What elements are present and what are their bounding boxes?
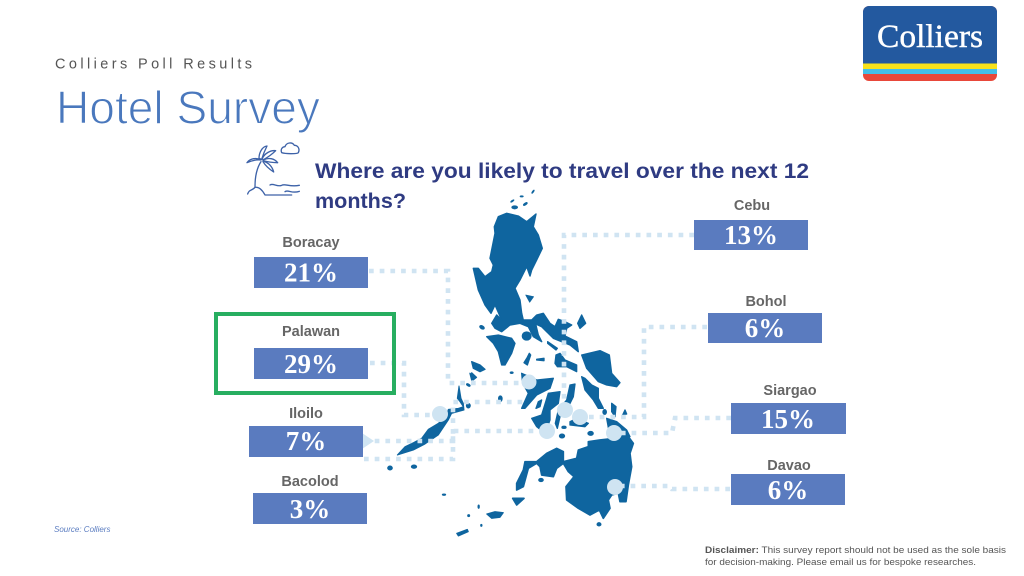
- disclaimer: for decision-making. Please email us for bespoke researches.: [705, 557, 976, 568]
- Sulu islets: [442, 494, 503, 536]
- callout: Iloilo: Iloilo: [289, 406, 323, 422]
- callout: Palawan: [254, 324, 368, 379]
- Palawan: [388, 373, 477, 470]
- callout: Bohol: 6%: [745, 313, 785, 343]
- callout: Cebu: 13%: [724, 220, 778, 250]
- source note: Source: Colliers: [54, 525, 110, 534]
- callout: Cebu: [694, 198, 808, 250]
- icon: palm tree island: [247, 143, 299, 195]
- logo: [863, 6, 997, 81]
- callout: Davao: [731, 458, 845, 505]
- Visayas and Mindoro: [470, 315, 630, 437]
- highlight frame: Palawan: [216, 314, 394, 393]
- callout: Boracay: Boracay: [282, 235, 340, 251]
- dotted connector lines: [364, 235, 731, 489]
- map of the Philippines: [388, 190, 633, 536]
- callout: Bohol: Bohol: [745, 294, 787, 310]
- logo: Colliers: [877, 19, 983, 55]
- callout: Iloilo: 7%: [286, 426, 326, 456]
- callout: Boracay: 21%: [284, 258, 338, 288]
- callout: Siargao: 15%: [761, 404, 815, 434]
- question heading: Where are you likely to travel over the next 12: [315, 159, 809, 183]
- callout: Siargao: [731, 383, 846, 434]
- callout: Davao: 6%: [768, 475, 808, 505]
- title: Hotel Survey: [56, 82, 320, 134]
- callout: Palawan: 29%: [284, 349, 338, 379]
- disclaimer: [705, 545, 1006, 568]
- disclaimer: Disclaimer: This survey report should not be used as the sole basis: [705, 545, 1006, 556]
- callout: Bacolod: 3%: [290, 494, 330, 524]
- callout: Boracay: [254, 235, 368, 288]
- subtitle: Colliers Poll Results: [55, 56, 252, 72]
- callout: Bohol: [708, 294, 822, 343]
- question heading: [315, 159, 809, 213]
- Luzon: [473, 213, 578, 352]
- callout: Cebu: Cebu: [734, 198, 770, 214]
- callout: Iloilo: [249, 406, 363, 457]
- location markers: [362, 374, 623, 495]
- callout: Bacolod: Bacolod: [281, 474, 339, 490]
- Mindanao: [513, 432, 633, 526]
- callout: Siargao: Siargao: [763, 383, 817, 399]
- callout: Davao: Davao: [767, 458, 811, 474]
- callout: Bacolod: [253, 474, 367, 524]
- callout: Palawan: Palawan: [282, 324, 340, 340]
- northern islets: [510, 190, 535, 302]
- question heading: months?: [315, 189, 406, 213]
